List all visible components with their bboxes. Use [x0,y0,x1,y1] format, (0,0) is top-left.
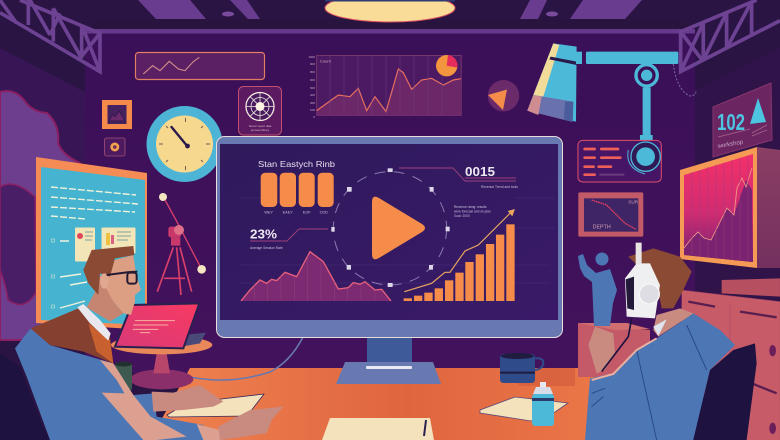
jacket [15,328,207,440]
glasses [107,272,137,284]
globe badge [238,86,282,135]
notebook [480,397,568,421]
screen title: Stan Eastych Rinb [258,159,335,169]
small chart panel: DEPTH [593,224,611,230]
headset [625,263,660,318]
stat 0015 [399,164,518,189]
pink wall chart [680,147,780,268]
side table and laptop [111,303,212,389]
neck [653,308,693,337]
ceiling lamp [325,0,455,22]
wall blob [0,91,80,340]
collar [77,304,111,341]
line chart panel [136,52,264,80]
tablet on desk [167,394,264,417]
small chart panel: SUR [628,199,639,204]
metric display [713,83,772,157]
photo frame icon [102,100,132,129]
tripod ball [159,193,176,220]
globe badge: Server report data [249,124,272,128]
dashed dial ring [331,168,450,287]
area chart poster: 100 [310,108,315,112]
wall-side screen text panel [36,157,147,330]
orange tile chart: EOF [303,210,311,214]
stat 0015: 0015 [465,164,495,179]
area chart poster [308,55,461,119]
side note text: Goal: 2000 [454,214,470,218]
water bottle [532,382,554,426]
area chart poster: 500 [310,86,315,90]
desk [150,337,665,440]
sleeve highlight [100,360,187,440]
pie chart [436,55,457,76]
monitor stand [336,337,441,384]
dial icon [488,80,519,111]
ear [100,273,109,289]
side note text: Revenue rising: results [454,205,487,209]
metric display: 102 [717,109,745,135]
stat 23 percent [250,228,328,250]
area chart [241,252,391,301]
orange tile chart [261,173,334,214]
ceiling beams [138,0,642,19]
blue statue on pedestal [578,252,650,377]
wall clock [146,106,222,182]
tripod model [157,220,206,295]
orange tile chart: CDD [320,210,328,214]
analyst right [585,243,757,440]
cable [602,318,632,372]
area chart poster: 1000 [308,55,315,59]
control panel [578,140,661,182]
analyst left [15,246,283,440]
stat 23 percent: 23% [250,228,277,242]
desk lamp arm [527,43,696,143]
globe badge: process library [251,128,270,132]
area chart poster: 300 [310,101,315,105]
side note text [454,205,491,218]
orange tile chart: EAEY [283,210,293,214]
area chart poster: 800 [310,70,315,74]
hand [588,327,615,373]
hair [83,246,134,295]
area chart poster: 900 [310,62,315,66]
shoulder wrap [31,308,113,363]
left chair [0,353,50,440]
monitor [216,136,562,338]
area chart poster: Count [320,58,332,64]
small chart panel [578,192,643,237]
rising bar chart [404,209,515,301]
small camera icon [104,138,125,156]
arm and hand [152,385,223,412]
metric display: workshop [716,139,744,150]
hair [628,248,692,308]
face [100,255,141,315]
right truss [681,0,780,72]
cabinet [680,278,780,440]
play button [372,197,425,259]
side note text: were forecast and on plan [454,210,491,214]
stat 0015: Revenue Trend and tools [481,185,518,189]
area chart poster: 0 [313,115,315,119]
blue mug [500,353,543,383]
orange tile chart: WEY [264,210,273,214]
chair [693,343,757,440]
area chart poster: 600 [310,78,315,82]
shirt collar [653,319,667,336]
left truss [0,0,100,72]
green mug [115,362,132,390]
jacket [585,313,735,440]
stat 23 percent: Average Session Rate [250,246,283,250]
paper and pen [322,418,434,440]
area chart poster: 400 [310,93,315,97]
